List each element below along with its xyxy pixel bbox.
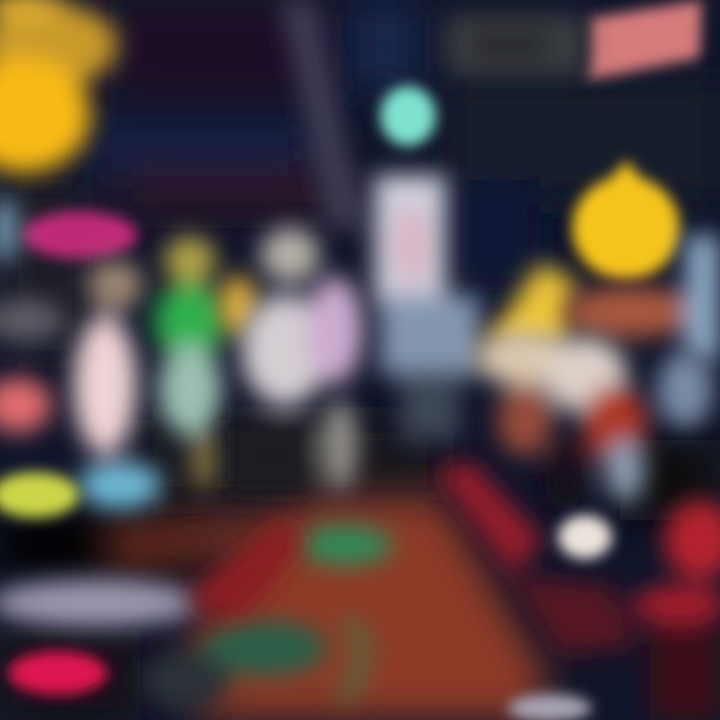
lamp: yellow top-left [0,0,118,173]
figure: pink hat [22,211,138,259]
left stack: red, yellow-green, grey and crimson shapes [0,196,200,695]
figure: white and lilac characters [228,227,363,491]
cone: yellow left [485,262,575,345]
pole: grey diagonal [280,0,365,230]
seats: red right foreground [435,460,720,720]
figure: pink and white character [73,259,162,509]
tower: teal light and white column [374,86,480,440]
group: right-hand figures [475,330,713,510]
highlight: white shoe [508,515,612,720]
table: brown right [564,235,720,360]
figure: yellow character [218,275,258,335]
floor patches: green [140,525,393,710]
floor: red-brown carpet [100,495,550,720]
cone: yellow diamond [572,160,680,280]
figure: green character [154,236,226,490]
sign: pink top-right [588,0,702,80]
sign: grey top-centre [445,15,585,75]
chair: red centre-left [190,520,305,615]
